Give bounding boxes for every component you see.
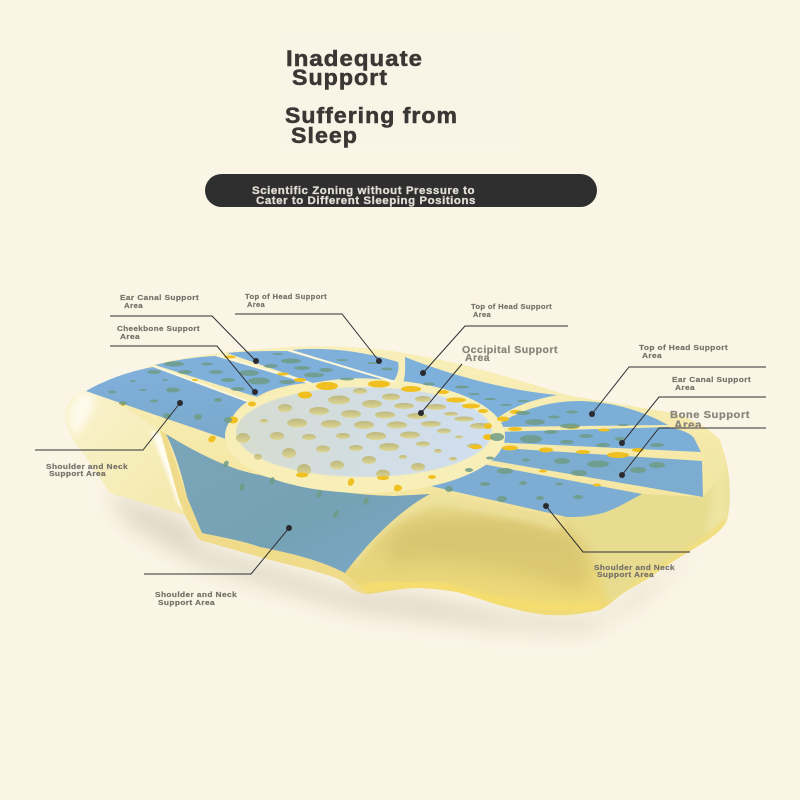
label: shoulder front: Shoulder and Neck — [155, 590, 237, 599]
label: shoulder front — [155, 590, 237, 607]
label: top of head left: Area — [247, 300, 265, 309]
label: occipital: Occipital Support — [462, 344, 558, 356]
label: top of head middle — [471, 302, 552, 319]
leader: shoulder left — [35, 400, 183, 450]
leader: shoulder right — [543, 503, 690, 552]
front hump — [340, 493, 612, 620]
label: top of head left: Top of Head Support — [245, 292, 327, 301]
zone: left shoulder and neck — [86, 367, 247, 439]
ridge highlight — [150, 430, 186, 512]
leader: bone support — [619, 428, 766, 478]
label: shoulder right: Support Area — [597, 570, 654, 579]
label: ear canal right: Ear Canal Support — [672, 375, 751, 384]
zone: top of head left — [292, 349, 399, 382]
zone: bone support — [477, 447, 703, 497]
pillow illustration — [60, 346, 735, 630]
label: shoulder left: Support Area — [49, 469, 106, 478]
label: shoulder left — [46, 462, 128, 478]
occipital holes — [236, 388, 490, 478]
title: Suffering from — [285, 103, 458, 128]
label: shoulder right — [594, 563, 675, 579]
zone: shoulder and neck front — [166, 434, 430, 573]
label: shoulder front: Support Area — [158, 598, 215, 607]
label: bone support: Area — [674, 418, 702, 432]
subtitle banner: Cater to Different Sleeping Positions — [256, 195, 476, 207]
zone: ear canal — [227, 351, 393, 383]
subtitle banner: Scientific Zoning without Pressure to — [252, 185, 475, 197]
pillow body — [65, 346, 730, 615]
leader: ear canal right — [619, 397, 766, 446]
blue zone holes — [108, 353, 665, 519]
right outer glow — [708, 460, 730, 531]
leader: ear canal left — [110, 316, 259, 364]
pillow side faces — [60, 388, 735, 620]
hump top light — [352, 499, 560, 565]
label: top of head left — [245, 292, 327, 309]
hump shading — [392, 522, 586, 587]
leader: top of head middle — [420, 326, 568, 376]
label: ear canal right — [672, 375, 751, 392]
label: bone support — [670, 409, 750, 432]
label: ear canal left: Ear Canal Support — [120, 293, 199, 302]
title — [280, 32, 520, 149]
label: shoulder left: Shoulder and Neck — [46, 462, 128, 471]
label: ear canal left — [120, 293, 199, 310]
right top face — [560, 460, 735, 612]
occipital ring — [225, 379, 505, 493]
leader: top of head left — [235, 314, 382, 364]
leader: shoulder front — [144, 525, 292, 574]
leader: top of head right — [589, 367, 766, 417]
zone: cheekbone — [155, 356, 307, 397]
label: ear canal left: Area — [124, 301, 143, 310]
occipital area — [236, 387, 492, 477]
left lobe side — [65, 391, 184, 515]
label: top of head right — [639, 343, 728, 360]
zone: top of head middle — [403, 357, 557, 420]
label: top of head right: Top of Head Support — [639, 343, 728, 352]
white strips between zones — [153, 350, 395, 401]
label: bone support: Bone Support — [670, 409, 750, 421]
label: occipital: Area — [465, 352, 490, 364]
label: cheekbone: Cheekbone Support — [117, 324, 200, 333]
left lobe highlight — [70, 392, 96, 436]
hump bottom light — [362, 582, 510, 608]
label: top of head middle: Top of Head Support — [471, 302, 552, 311]
label: occipital — [462, 344, 558, 364]
title: Sleep — [291, 123, 358, 148]
pillow shadow — [105, 490, 700, 630]
label: cheekbone — [117, 324, 200, 341]
leader: occipital — [418, 364, 462, 416]
zone: shoulder and neck right — [417, 462, 642, 517]
label: top of head right: Area — [642, 351, 662, 360]
label: ear canal right: Area — [675, 383, 695, 392]
subtitle banner — [205, 174, 597, 207]
right lower lip — [605, 522, 727, 610]
zone: ear canal right — [490, 427, 701, 452]
label: shoulder right: Shoulder and Neck — [594, 563, 675, 572]
zone: top of head right — [495, 401, 668, 427]
leader: cheekbone — [110, 346, 258, 395]
title: Support — [292, 65, 388, 90]
yellow ring holes — [121, 356, 644, 492]
label: cheekbone: Area — [120, 332, 140, 341]
title: Inadequate — [286, 46, 423, 71]
front yellow rim — [160, 430, 368, 594]
label: top of head middle: Area — [473, 310, 491, 319]
